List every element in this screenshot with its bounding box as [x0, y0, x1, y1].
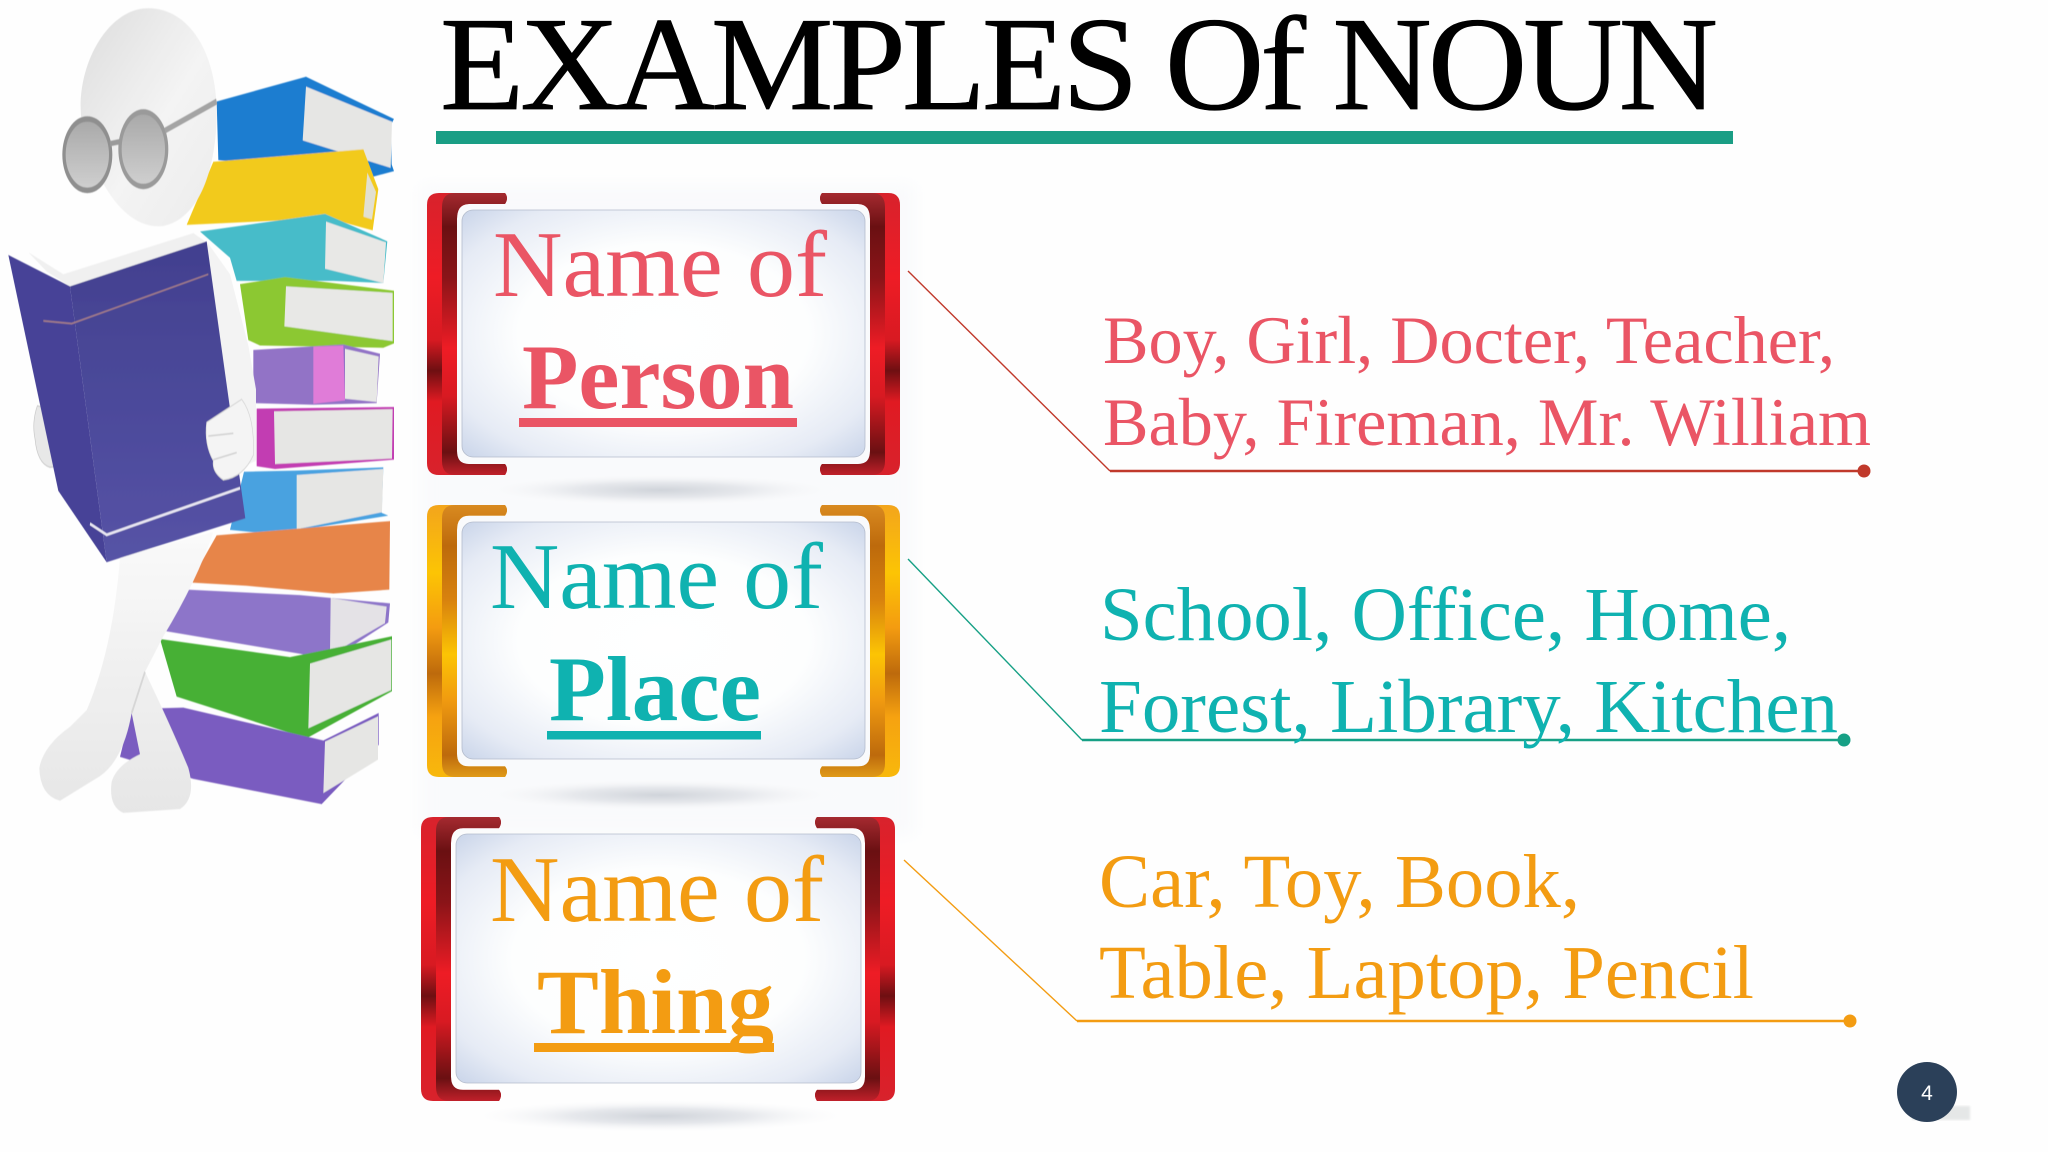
card text line two: Thing: [537, 951, 774, 1053]
card shadow: [470, 778, 850, 812]
examples: thing: [904, 840, 1856, 1028]
panel: name of place: [427, 505, 900, 812]
card underline: [547, 731, 761, 740]
example text line one: Car, Toy, Book,: [1099, 840, 1580, 924]
card text line two: Place: [549, 638, 761, 740]
card text line one: Name of: [490, 525, 824, 629]
card text line two: Person: [522, 326, 794, 428]
icon: left hand: [34, 406, 59, 467]
connector line with dot: [908, 559, 1850, 746]
example text line one: School, Office, Home,: [1100, 573, 1791, 657]
examples: person: [908, 271, 1871, 478]
example text line two: Table, Laptop, Pencil: [1099, 931, 1754, 1015]
panel: name of person: [427, 193, 900, 507]
panel: name of thing: [421, 817, 895, 1133]
card text line one: Name of: [493, 213, 828, 317]
connector line with dot: [908, 271, 1870, 478]
icon: figure body and legs: [39, 241, 256, 813]
card panel: [456, 834, 861, 1083]
card underline: [534, 1043, 774, 1052]
left red bracket: [421, 817, 501, 1101]
title underline bar: [436, 131, 1733, 144]
page number badge: [1897, 1062, 1970, 1122]
left red bracket: [427, 193, 507, 475]
examples: place: [908, 559, 1850, 749]
icon: head: [81, 8, 217, 226]
card panel: [462, 522, 865, 759]
icon: stack of books: [120, 77, 394, 804]
card underline: [519, 418, 797, 427]
page number: 4: [1921, 1082, 1933, 1105]
icon: open purple book: [8, 233, 245, 562]
example text line two: Baby, Fireman, Mr. William: [1103, 384, 1871, 460]
card shadow: [465, 1099, 855, 1133]
right red bracket: [820, 193, 900, 475]
right gold bracket: [820, 505, 900, 777]
example text line two: Forest, Library, Kitchen: [1099, 665, 1838, 749]
left gold bracket: [427, 505, 507, 777]
badge circle: [1897, 1062, 1957, 1122]
example text line one: Boy, Girl, Docter, Teacher,: [1103, 302, 1835, 378]
icon: right hand: [206, 399, 254, 480]
badge shadow: [1912, 1106, 1970, 1120]
illustration: reader with a stack of books: [8, 8, 394, 813]
card shadow: [470, 473, 850, 507]
connector line with dot: [904, 860, 1856, 1028]
icon: glasses: [64, 101, 217, 190]
card panel: [462, 210, 865, 457]
right red bracket: [815, 817, 895, 1101]
card text line one: Name of: [490, 838, 825, 942]
